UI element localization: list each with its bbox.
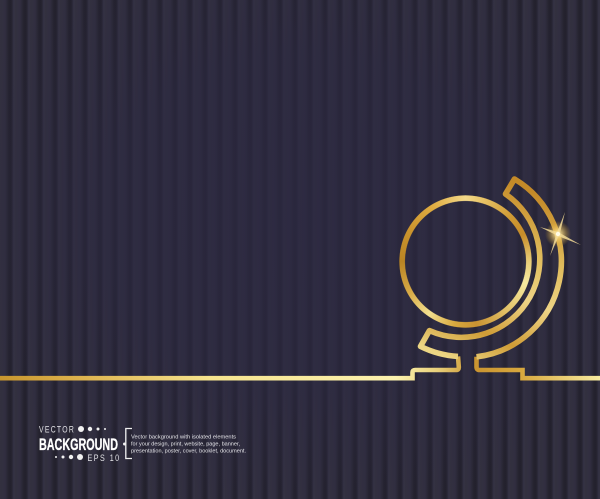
- description text: Vector background with isolated elements: [131, 434, 236, 440]
- gold baseline right section: [476, 357, 600, 378]
- globe stand arm: [420, 179, 561, 357]
- BACKGROUND label: BACKGROUND: [39, 436, 118, 454]
- gold baseline left section: [0, 356, 459, 378]
- dots upper: [78, 426, 106, 432]
- globe ring: [399, 195, 532, 328]
- description text: presentation, poster, cover, booklet, document.: [131, 448, 246, 454]
- EPS 10 label: EPS 10: [88, 452, 121, 463]
- sparkle: [540, 212, 581, 256]
- dots lower: [55, 454, 83, 460]
- VECTOR label: VECTOR: [39, 424, 75, 435]
- description text: [131, 434, 246, 454]
- caption logo: [39, 424, 246, 463]
- description text: for your design, print, website, page, banner,: [131, 442, 241, 448]
- bracket notch: [123, 442, 126, 446]
- bracket: [126, 428, 132, 458]
